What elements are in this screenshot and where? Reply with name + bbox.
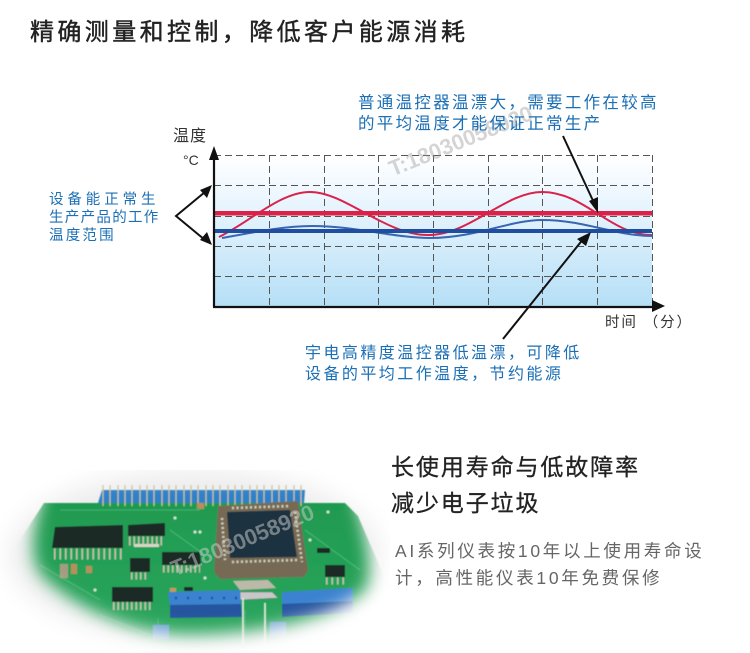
arrow to blue line [503, 232, 591, 339]
description text [395, 541, 704, 590]
description text: 计，高性能仪表10年免费保修 [395, 565, 662, 590]
callout: high precision controller: 宇电高精度温控器低温漂，可降低 [305, 339, 582, 363]
callout: working range [49, 191, 160, 244]
callout: conventional controller: 的平均温度才能保证正常生产 [358, 115, 602, 133]
board [20, 502, 382, 647]
callout: conventional controller [358, 89, 659, 133]
pin header [98, 490, 305, 503]
x axis label: 时间 （分） [605, 315, 693, 331]
small chips [128, 523, 165, 536]
passives [60, 564, 68, 578]
watermark photo: T:18030058920 [167, 499, 318, 581]
soft halo [10, 470, 380, 640]
temperature chart [174, 136, 665, 340]
callout: high precision controller [305, 339, 582, 384]
watermark top: T:18030058920 [385, 101, 536, 181]
callout: conventional controller: 普通温控器温漂大，需要工作在较高 [358, 89, 659, 113]
vias [94, 510, 330, 592]
description text: AI系列仪表按10年以上使用寿命设 [395, 541, 704, 561]
y axis label: 温度 [173, 128, 207, 145]
red drift curve [219, 192, 652, 237]
unit label: °C [183, 152, 199, 168]
y axis arrow [213, 160, 215, 307]
grid [214, 155, 652, 307]
callout: working range: 生产产品的工作 [49, 210, 160, 226]
heading: long life: 减少电子垃圾 [391, 490, 540, 516]
red average line [214, 211, 652, 216]
title: 精确测量和控制，降低客户能源消耗 [30, 12, 468, 47]
chart background [214, 155, 652, 307]
blue drift curve [222, 220, 653, 238]
crystal [233, 580, 276, 590]
callout: high precision controller: 设备的平均工作温度，节约能源 [305, 360, 563, 384]
callout: working range: 设备能正常生 [49, 192, 159, 208]
heading: long life: 长使用寿命与低故障率 [391, 454, 640, 480]
callout: working range: 温度范围 [49, 228, 116, 244]
large chip [52, 525, 123, 548]
blue average line [214, 229, 652, 233]
socket [214, 501, 308, 579]
heading: long life [391, 454, 640, 516]
blue terminals [168, 590, 241, 605]
x axis arrow [213, 306, 655, 308]
arrow to red line [563, 136, 598, 213]
traces [40, 509, 360, 630]
circuit board photo [10, 470, 383, 649]
range bracket arrows [176, 192, 205, 240]
